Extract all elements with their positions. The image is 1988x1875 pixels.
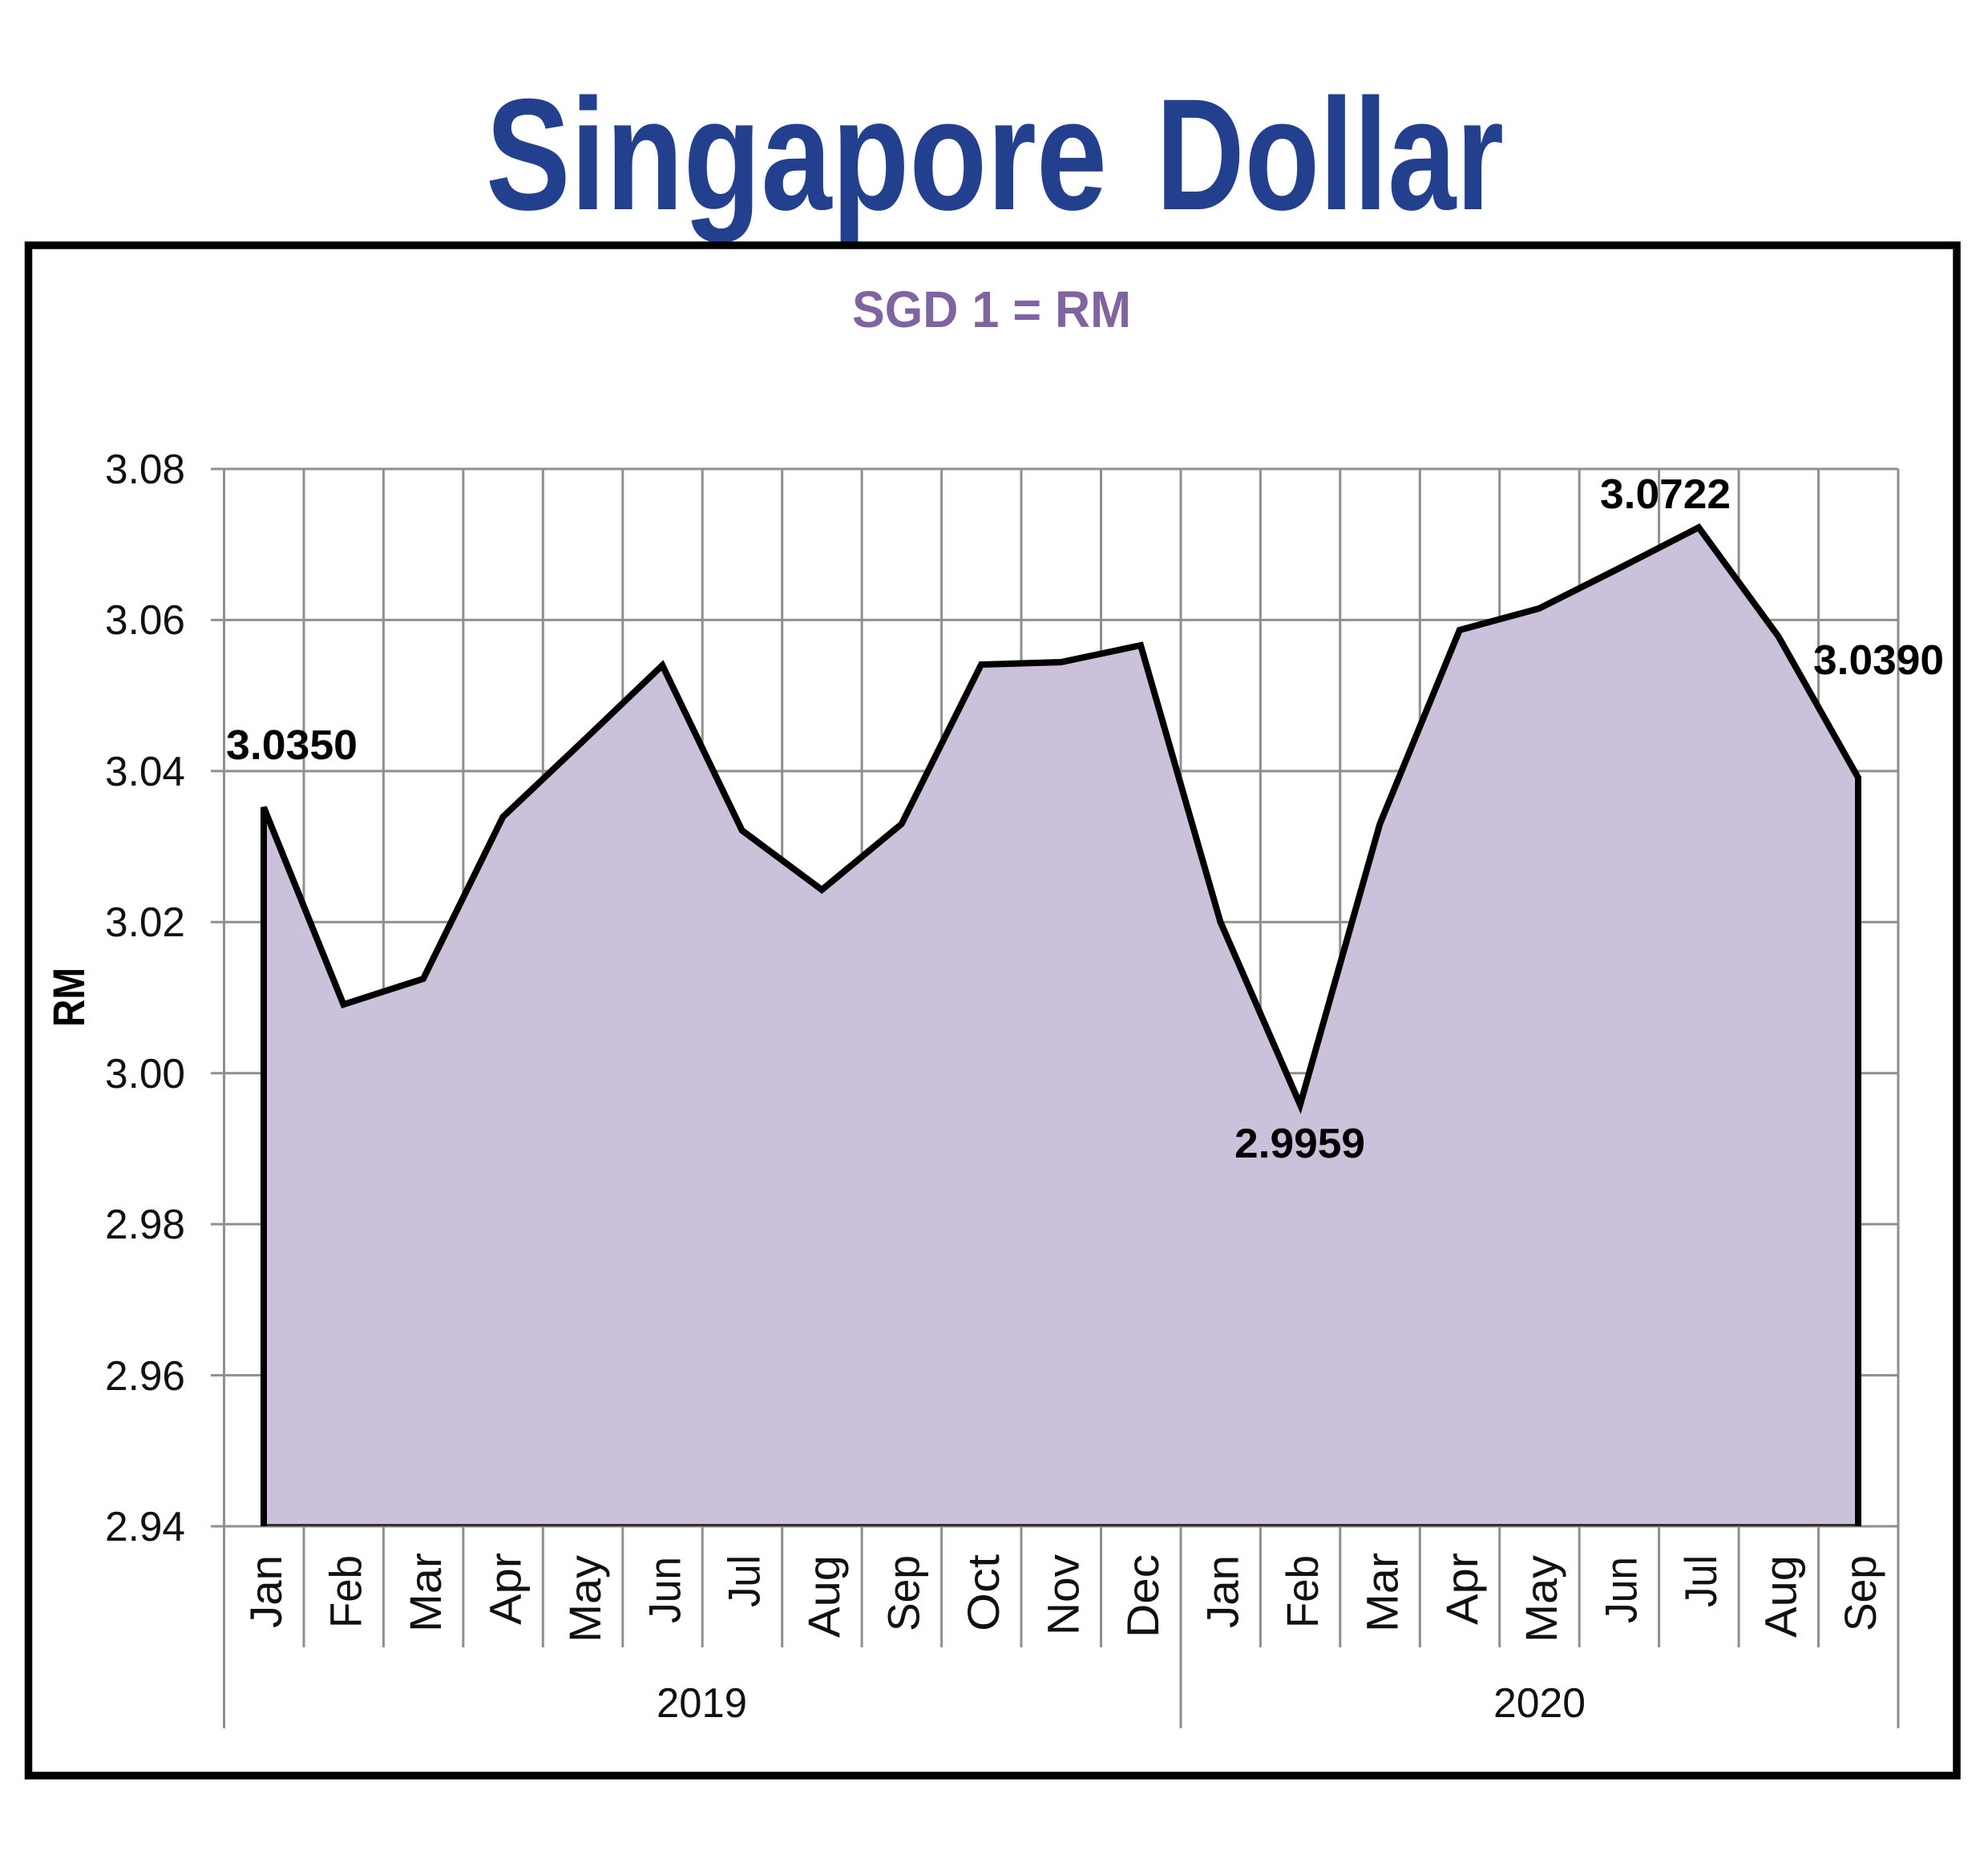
x axis month labels: Feb	[321, 1555, 370, 1628]
x axis month labels: Dec	[1117, 1554, 1168, 1638]
y axis labels: 3.06	[105, 597, 185, 644]
x axis month labels: Mar	[400, 1553, 451, 1632]
x axis month labels: May	[1516, 1555, 1566, 1643]
y axis labels: 2.94	[105, 1504, 185, 1550]
x axis year labels: 2019	[657, 1680, 747, 1727]
y axis labels	[105, 447, 185, 1550]
x axis month labels: May	[560, 1555, 610, 1643]
data labels: 3.0350	[226, 722, 358, 769]
x axis month labels: Jan	[240, 1555, 291, 1628]
data labels: 2.9959	[1234, 1121, 1365, 1167]
x axis year labels	[657, 1680, 1586, 1727]
x axis month labels: Jul	[719, 1555, 770, 1607]
x axis month labels: Apr	[1436, 1553, 1487, 1625]
area baseline	[261, 1524, 1861, 1526]
y axis labels: 3.00	[105, 1051, 185, 1097]
panel: chart frame	[29, 245, 1957, 1776]
x axis month labels: Jul	[1675, 1555, 1726, 1607]
x axis month labels: Sep	[1835, 1555, 1885, 1631]
data labels	[226, 471, 1944, 1167]
data labels: 3.0722	[1600, 471, 1731, 518]
title: Dollar	[1156, 66, 1504, 243]
x axis year labels: 2020	[1493, 1680, 1586, 1727]
rate line	[264, 527, 1858, 1526]
x axis month labels: Aug	[1756, 1555, 1806, 1638]
y axis labels: 2.98	[105, 1202, 185, 1248]
title: Singapore	[486, 66, 1107, 243]
x axis month labels: Jan	[1197, 1555, 1247, 1628]
x axis month labels: Feb	[1277, 1555, 1327, 1628]
x axis month labels	[240, 1553, 1885, 1643]
x axis month labels: Sep	[879, 1555, 929, 1631]
y axis labels: 3.08	[105, 447, 185, 493]
area fill	[264, 527, 1858, 1526]
x axis month labels: Jun	[1596, 1557, 1647, 1623]
y axis labels: 3.02	[105, 899, 185, 946]
x axis month labels: Nov	[1037, 1554, 1089, 1635]
x axis month labels: Aug	[798, 1555, 849, 1638]
x axis month labels: Apr	[479, 1553, 530, 1625]
x axis month labels: Oct	[958, 1554, 1008, 1631]
y axis labels: 3.04	[105, 749, 185, 795]
y axis title: RM	[43, 968, 94, 1027]
data labels: 3.0390	[1813, 637, 1944, 684]
y axis labels: 2.96	[105, 1353, 185, 1400]
x axis month labels: Mar	[1356, 1553, 1407, 1632]
subtitle: SGD 1 = RM	[852, 281, 1131, 338]
chart gridlines	[211, 469, 1898, 1728]
x axis month labels: Jun	[639, 1557, 689, 1623]
area chart: exchange rate	[261, 527, 1861, 1526]
